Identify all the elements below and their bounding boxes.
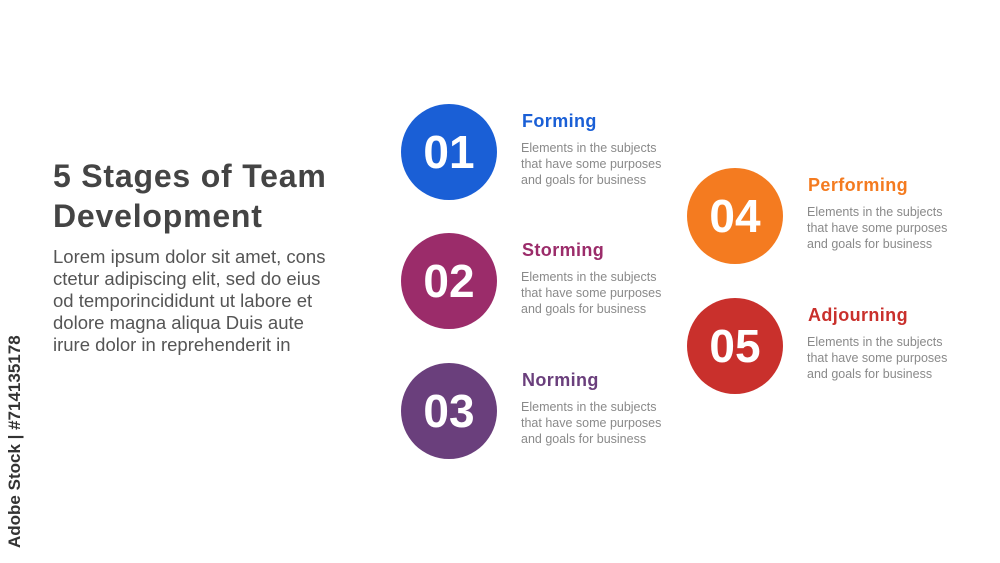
icon: circle 03: 03 <box>423 385 475 437</box>
stage 04 <box>687 168 947 264</box>
description: and goals for business <box>521 173 646 187</box>
description: and goals for business <box>807 237 932 251</box>
stage 01 <box>401 104 661 200</box>
description: that have some purposes <box>521 416 661 430</box>
description: that have some purposes <box>521 286 661 300</box>
description <box>521 141 661 187</box>
heading: Adjourning: Adjourning <box>808 305 908 325</box>
heading: Norming: Norming <box>522 370 599 390</box>
description: Elements in the subjects <box>807 335 942 349</box>
heading: Performing: Performing <box>808 175 908 195</box>
body text <box>53 246 325 355</box>
title: 5 Stages of Team <box>53 158 327 194</box>
heading: Forming: Forming <box>522 111 597 131</box>
description: that have some purposes <box>521 157 661 171</box>
heading: Storming: Storming <box>522 240 604 260</box>
stage 05 <box>687 298 947 394</box>
icon: circle 05: 05 <box>709 320 761 372</box>
watermark side text: Adobe Stock | #714135178 <box>5 335 24 548</box>
icon: circle 01: 01 <box>423 126 475 178</box>
icon: circle 05 <box>687 298 783 394</box>
stage 03 <box>401 363 661 459</box>
description: Elements in the subjects <box>807 205 942 219</box>
body text: Lorem ipsum dolor sit amet, cons <box>53 246 325 267</box>
description: and goals for business <box>521 302 646 316</box>
description: and goals for business <box>521 432 646 446</box>
icon: circle 02 <box>401 233 497 329</box>
icon: circle 03 <box>401 363 497 459</box>
description <box>521 400 661 446</box>
icon: circle 04 <box>687 168 783 264</box>
description: Elements in the subjects <box>521 270 656 284</box>
description: that have some purposes <box>807 351 947 365</box>
icon: circle 04: 04 <box>709 190 761 242</box>
icon: circle 02: 02 <box>423 255 475 307</box>
body text: ctetur adipiscing elit, sed do eius <box>53 268 320 289</box>
description <box>521 270 661 316</box>
title: Development <box>53 198 263 234</box>
body text: irure dolor in reprehenderit in <box>53 334 291 355</box>
body text: dolore magna aliqua Duis aute <box>53 312 304 333</box>
icon: circle 01 <box>401 104 497 200</box>
description <box>807 335 947 381</box>
stage 02 <box>401 233 661 329</box>
description: and goals for business <box>807 367 932 381</box>
description: that have some purposes <box>807 221 947 235</box>
description <box>807 205 947 251</box>
description: Elements in the subjects <box>521 400 656 414</box>
description: Elements in the subjects <box>521 141 656 155</box>
title <box>53 158 327 234</box>
body text: od temporincididunt ut labore et <box>53 290 312 311</box>
